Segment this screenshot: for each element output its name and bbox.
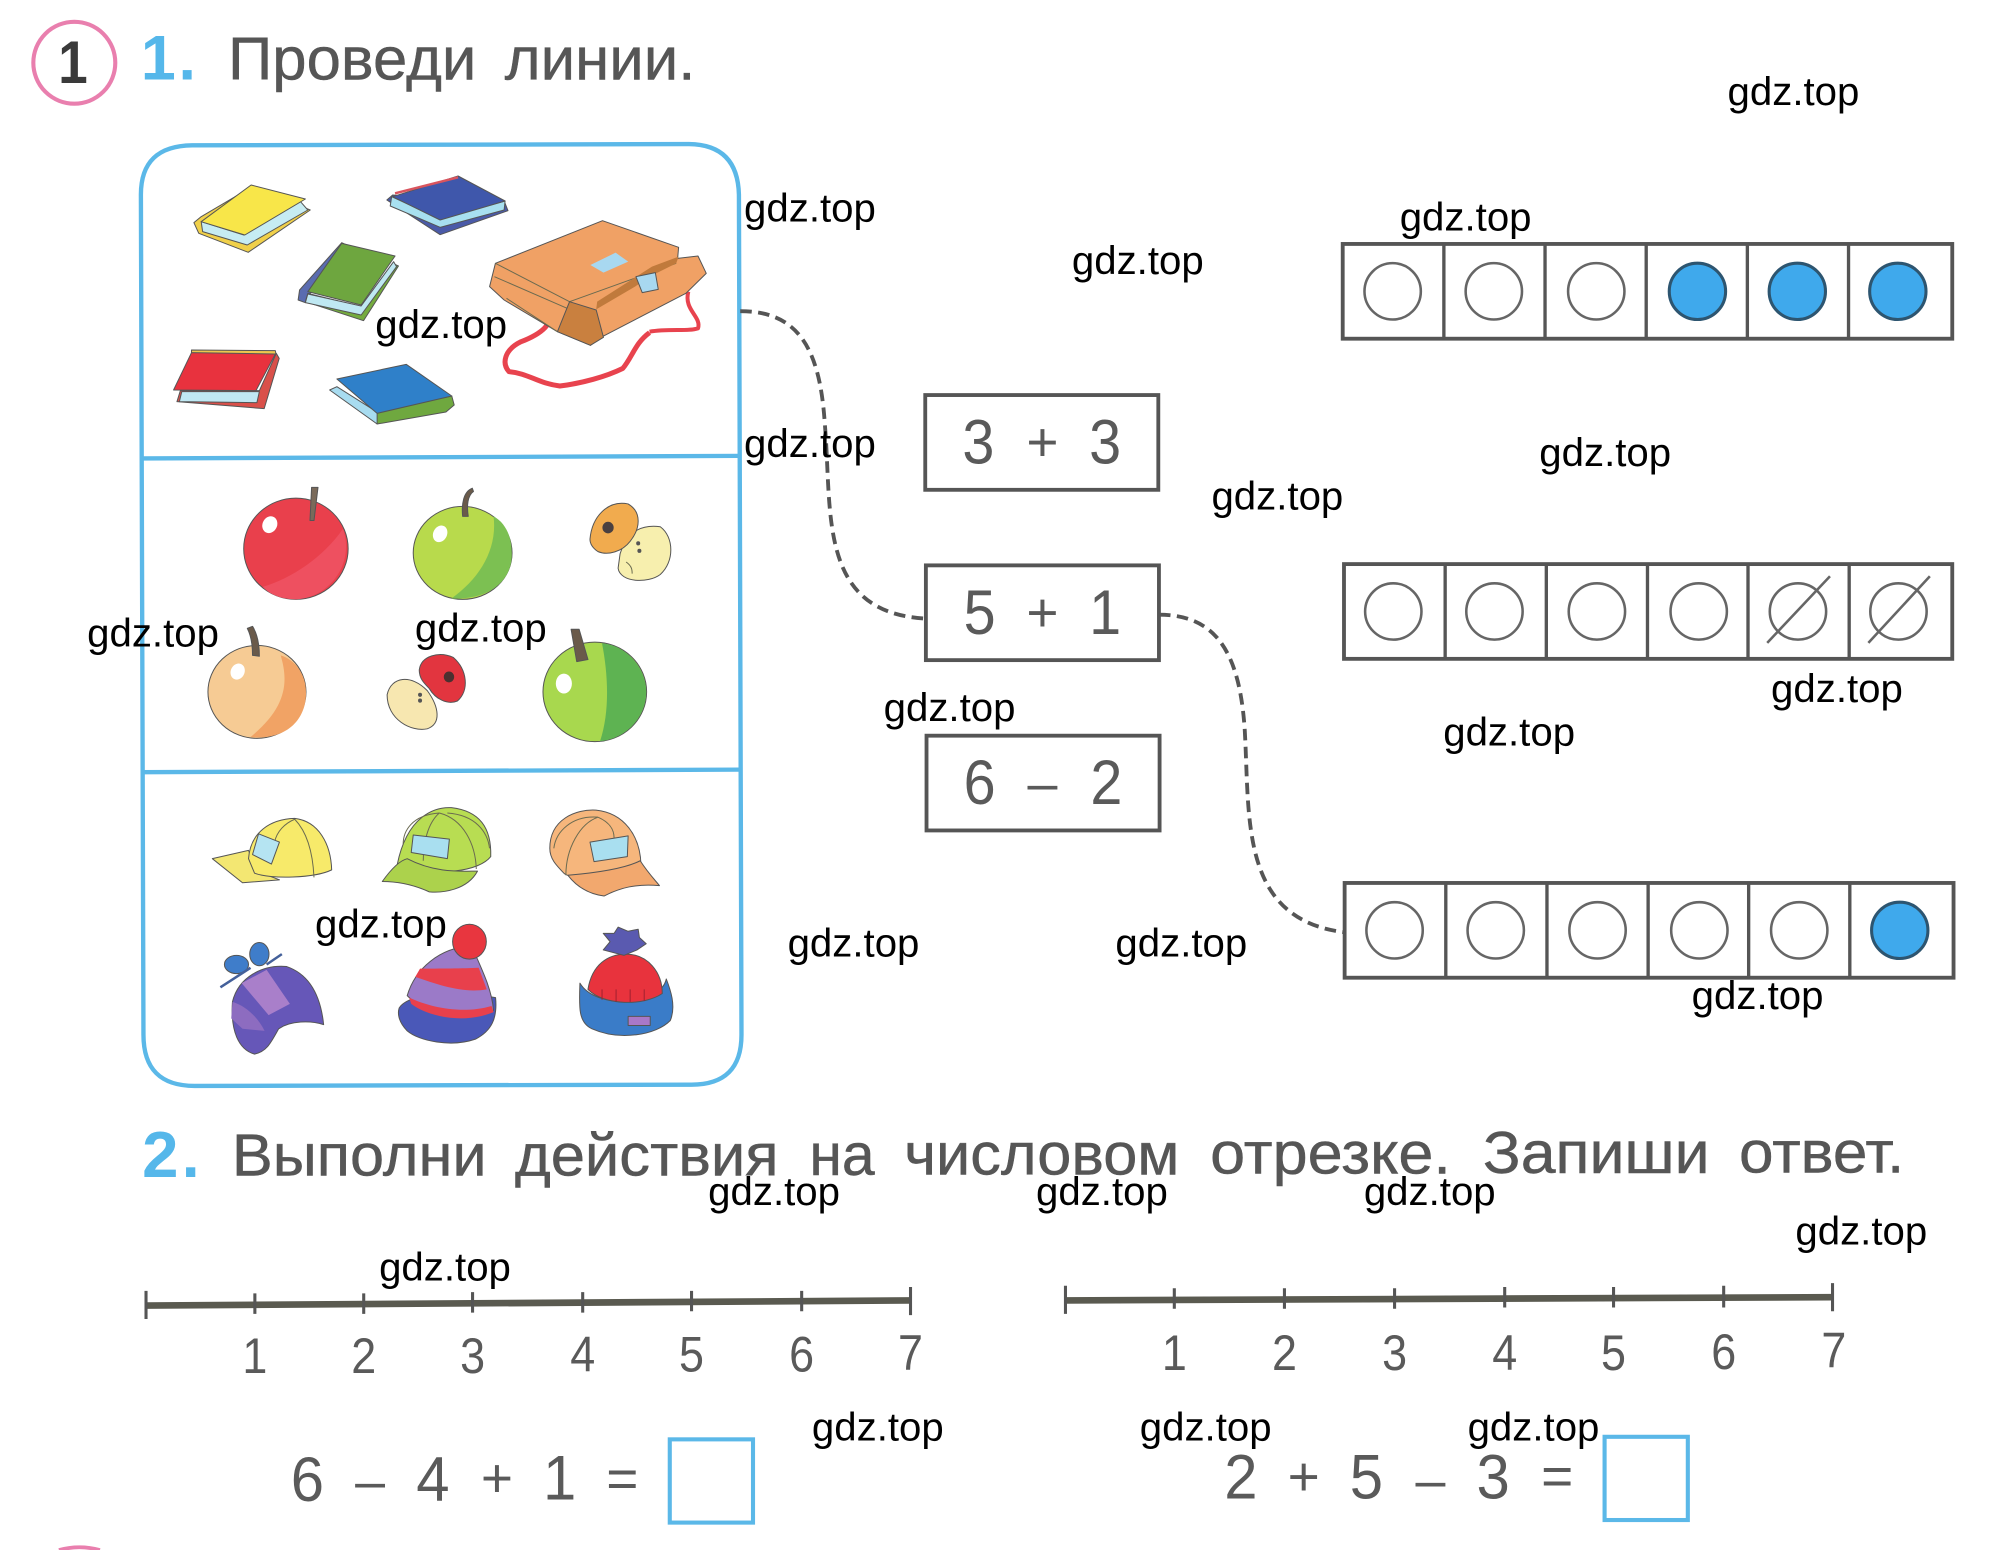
icon: bitten orange apple [590,503,671,580]
watermarks: gdz.top [1795,1209,1927,1254]
watermarks: gdz.top [379,1245,511,1290]
watermarks: gdz.top [1468,1405,1599,1450]
number line: left: 2 [351,1328,376,1384]
badge: lesson number 1: 1 [58,29,88,96]
watermarks: gdz.top [884,685,1015,730]
equation: 6 - 4 + 1: 1 [543,1444,576,1514]
badge: next lesson cut off at the page edge [59,1547,100,1550]
heading: task 2: ответ. [1739,1120,1904,1185]
number line: right: 2 [1272,1325,1297,1381]
watermarks: gdz.top [1364,1169,1496,1214]
heading: task 2: 2. [142,1118,200,1191]
box: expression 5 + 1 [926,565,1159,660]
heading: task 2: действия [515,1124,779,1189]
icon: purple winter hat [220,942,324,1054]
icon: red book [174,350,279,409]
watermarks: gdz.top [1539,430,1671,475]
equation: 6 - 4 + 1 [291,1444,638,1515]
box: expression 6 - 2 [927,736,1160,830]
number line: right: 1 [1162,1325,1187,1381]
number line: left: 5 [679,1326,704,1382]
equation: 6 - 4 + 1: 6 [291,1445,324,1515]
equation: 2 + 5 - 3: 3 [1477,1442,1510,1512]
equation: 6 - 4 + 1: + [481,1447,513,1509]
icon: green apple two [543,629,647,742]
watermarks: gdz.top [744,421,876,466]
watermarks: gdz.top [1692,973,1823,1018]
equation: 2 + 5 - 3: 2 [1224,1442,1258,1512]
panel: picture groups [141,144,741,1086]
watermarks: gdz.top [87,611,219,656]
number line: left: 7 [898,1325,923,1381]
heading: task 2: на [809,1123,875,1188]
icon: green cap [382,808,491,892]
row: three empty and three filled circles [1343,243,1952,339]
row: four empty and two crossed circles [1344,563,1952,659]
number line: left: 6 [789,1326,814,1382]
heading: task 2 [142,1118,1904,1191]
heading: task 1: линии. [505,25,695,92]
equation: 2 + 5 - 3: + [1288,1446,1320,1508]
badge: lesson number 1 [33,22,115,104]
number line: right: 4 [1492,1325,1517,1381]
equation: 2 + 5 - 3 [1224,1442,1573,1512]
icon: blue book [330,364,454,424]
box: expression 3 + 3: 3 [1089,408,1121,478]
number line: left: 3 [460,1328,485,1384]
equation: 2 + 5 - 3: 5 [1350,1442,1383,1512]
heading: task 2: отрезке. [1210,1122,1451,1187]
box: expression 6 - 2: – [1027,754,1057,814]
watermarks: gdz.top [788,921,919,966]
number line: right: 7 [1821,1323,1846,1379]
icon: yellow book [194,185,310,252]
box: expression 5 + 1: 1 [1089,578,1121,648]
watermarks: gdz.top [375,302,507,347]
watermarks: gdz.top [1443,709,1575,754]
box: expression 5 + 1: + [1026,581,1058,643]
watermarks: gdz.top [1072,238,1204,283]
row: five empty and one filled circle [1345,882,1954,978]
number line: right: 5 [1601,1325,1626,1381]
watermarks: gdz.top [1115,921,1247,966]
watermarks: gdz.top [1728,69,1859,114]
heading: task 2: числовом [904,1122,1179,1187]
arrow: dashed line from 5+1 to dot row [1159,615,1345,932]
heading: task 1: Проведи [228,25,476,92]
watermarks: gdz.top [1771,666,1903,711]
heading: task 2: Выполни [232,1124,487,1189]
icon: green apple [413,488,512,599]
icon: pompom winter hat [398,924,496,1043]
icon: dark blue book [387,176,508,235]
icon: yellow cap [212,818,332,883]
watermarks: gdz.top [1211,474,1343,519]
watermarks: gdz.top [315,901,447,946]
box: expression 3 + 3 [925,395,1158,490]
icon: school bag [490,221,706,386]
equation: 6 - 4 + 1: – [355,1452,385,1512]
watermarks: gdz.top [1400,195,1532,240]
icon: red and blue winter hat [579,927,673,1035]
number line: left: 4 [570,1326,595,1382]
number line: right [1065,1283,1846,1381]
watermarks: gdz.top [708,1169,840,1214]
icon: red apple [244,487,348,599]
watermarks: gdz.top [1036,1169,1168,1214]
arrow: dashed line from books to 5+1 [740,311,925,619]
equation: 6 - 4 + 1: 4 [416,1445,450,1515]
illustration: apples and hats [208,487,673,1054]
icon: orange cap [550,810,659,896]
heading: task 1 [141,23,695,93]
number line: right: 6 [1711,1324,1736,1380]
box: expression 3 + 3: 3 [962,408,994,478]
number line: left [146,1287,923,1384]
equation: 6 - 4 + 1: = [606,1447,638,1509]
watermarks: gdz.top [1140,1405,1272,1450]
icon: bitten red apple [387,655,465,729]
equation: 2 + 5 - 3: – [1415,1450,1445,1510]
illustration: books and school bag [174,176,706,424]
watermarks: gdz.top [415,606,547,651]
box: expression 6 - 2: 2 [1090,748,1122,818]
answer box: left [670,1439,753,1523]
number line: right: 3 [1382,1325,1407,1381]
answer box: right [1605,1437,1688,1520]
box: expression 6 - 2: 6 [964,748,996,818]
box: expression 3 + 3: + [1026,411,1058,473]
icon: orange apple [208,626,306,738]
box: expression 5 + 1: 5 [964,578,996,648]
heading: task 1: 1. [141,23,196,93]
watermarks: gdz.top [744,186,876,231]
equation: 2 + 5 - 3: = [1541,1444,1573,1506]
icon: green book [298,243,398,321]
number line: left: 1 [242,1328,267,1384]
heading: task 2: Запиши [1483,1121,1710,1186]
watermarks: gdz.top [812,1405,944,1450]
